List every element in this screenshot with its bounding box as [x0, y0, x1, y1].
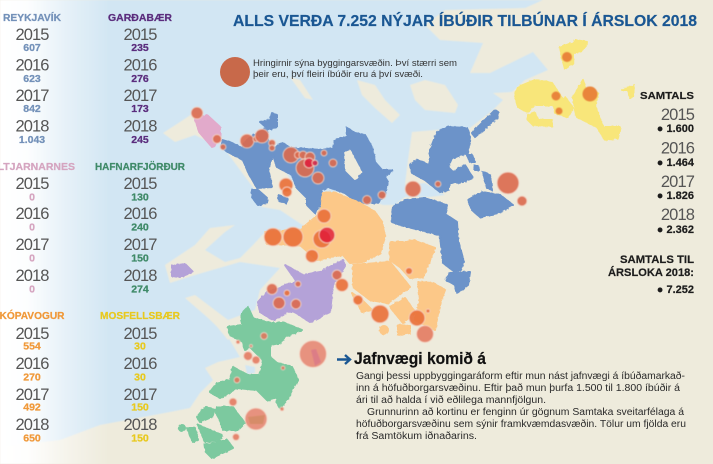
column: Kópavogur: 2017 [15, 386, 49, 404]
article text [356, 370, 686, 442]
column: Garðabær: 2018 [123, 118, 157, 136]
column: Seltjarnarnes: 0 [29, 222, 35, 234]
column: Kópavogur: 2015 [15, 325, 49, 343]
column: Kópavogur [0, 309, 65, 444]
column: Reykjavík: 607 [23, 42, 41, 54]
column: Kópavogur: 650 [23, 432, 41, 444]
column: Mosfellsbær: 2017 [123, 386, 157, 404]
totals by year: ● 1.826 [657, 190, 694, 202]
article text: Grunnurinn að kortinu er fenginn úr gögnum Samtaka sveitarfélaga á [367, 406, 684, 418]
column: Mosfellsbær: 30 [134, 372, 146, 384]
totals by year: 2016 [661, 140, 695, 158]
totals by year: 2017 [661, 173, 695, 191]
column: Kópavogur: KÓPAVOGUR [0, 309, 65, 322]
column: Seltjarnarnes: 0 [29, 252, 35, 264]
column: Mosfellsbær: 2015 [123, 325, 157, 343]
grand total: ● 7.252 [657, 284, 694, 296]
column: Reykjavík: 2015 [15, 26, 49, 44]
arrow icon [337, 355, 350, 364]
column: Seltjarnarnes: 0 [29, 284, 35, 296]
column: Reykjavík: 2017 [15, 87, 49, 105]
legend: circle explanation: þeir eru, því fleiri íbúðir eru á því svæði. [253, 69, 423, 79]
totals by year: 2015 [661, 106, 695, 124]
column: Hafnarfjörður: 2018 [123, 267, 157, 285]
article text: höfuðborgarsvæðinu sem sýnir framkvæmdasvæðin. Tölur um fjölda eru [356, 418, 686, 430]
column: Hafnarfjörður: 150 [131, 252, 149, 264]
map: Garðabær area (purple) [172, 260, 345, 322]
totals by year: ● 2.362 [657, 224, 694, 236]
legend: circle explanation: Hringirnir sýna byggingarsvæðin. Því stærri sem [253, 58, 457, 68]
totals by year: ● 1.464 [657, 157, 695, 169]
column: Mosfellsbær: 30 [134, 340, 146, 352]
column: Hafnarfjörður: 130 [131, 192, 149, 204]
column: Reykjavík [3, 11, 61, 146]
column: Garðabær: 276 [131, 73, 149, 85]
article text: ári til að halda í við eðlilega mannfjölgun. [356, 394, 546, 406]
column: Hafnarfjörður: 2016 [123, 205, 157, 223]
column: Garðabær [108, 12, 172, 146]
map: Hafnarfjörður area (green) [179, 307, 302, 458]
column: Reykjavík: 842 [23, 103, 41, 115]
column: Kópavogur: 270 [23, 372, 41, 384]
column: Seltjarnarnes: 2017 [15, 236, 49, 254]
column: Garðabær: 173 [131, 103, 149, 115]
map: Mosfellsbær area (yellow) [515, 40, 634, 140]
grand total: SAMTALS TIL [620, 254, 694, 266]
column: Mosfellsbær [100, 310, 180, 444]
column: Reykjavík: 1.043 [19, 134, 45, 146]
column: Hafnarfjörður: HAFNARFJÖRÐUR [95, 160, 185, 173]
column: Seltjarnarnes: 0 [29, 192, 35, 204]
column: Reykjavík: REYKJAVÍK [3, 11, 61, 24]
totals by year: SAMTALS [640, 90, 694, 102]
column: Garðabær: 2017 [123, 87, 157, 105]
column: Garðabær: 245 [131, 134, 149, 146]
column: Mosfellsbær: MOSFELLSBÆR [100, 310, 180, 322]
column: Hafnarfjörður: 2017 [123, 236, 157, 254]
title: ALLS VERÐA 7.252 NÝJAR ÍBÚÐIR TILBÚNAR Í ÁRSLOK 2018 [233, 11, 697, 30]
column: Kópavogur: 2018 [15, 416, 49, 434]
column: Kópavogur: 554 [23, 340, 41, 352]
grand total [608, 254, 694, 296]
article heading: Jafnvægi komið á [354, 350, 487, 368]
article text: inn á höfuðborgarsvæðinu. Eftir það mun þurfa 1.500 til 1.800 íbúðir á [356, 382, 680, 394]
map: Reykjavík area (blue) [222, 110, 513, 293]
column: Seltjarnarnes: 2018 [15, 267, 49, 285]
map: building-area circles [191, 52, 598, 440]
column: Kópavogur: 492 [23, 402, 41, 414]
column: Mosfellsbær: 2016 [123, 355, 157, 373]
legend: circle explanation [220, 57, 457, 87]
article text: Gangi þessi uppbyggingaráform eftir mun nást jafnvægi á íbúðamarkað- [356, 370, 685, 382]
column: Hafnarfjörður: 240 [131, 222, 149, 234]
column: Seltjarnarnes: 2015 [15, 175, 49, 193]
column: Mosfellsbær: 150 [131, 402, 149, 414]
column: Garðabær: GARÐABÆR [108, 12, 172, 24]
column: Hafnarfjörður: 2015 [123, 175, 157, 193]
column: Reykjavík: 2018 [15, 118, 49, 136]
column: Seltjarnarnes: 2016 [15, 205, 49, 223]
column: Hafnarfjörður [95, 160, 185, 296]
map: Kópavogur area (orange) [265, 192, 445, 335]
column: Garðabær: 235 [131, 42, 149, 54]
totals by year: ● 1.600 [657, 123, 694, 135]
column: Garðabær: 2015 [123, 26, 157, 44]
totals by year: 2018 [661, 206, 695, 224]
column: Seltjarnarnes [0, 161, 75, 296]
column: Reykjavík: 623 [23, 73, 41, 85]
column: Hafnarfjörður: 274 [131, 284, 149, 296]
totals by year [640, 90, 695, 236]
article text: frá Samtökum iðnaðarins. [356, 430, 477, 442]
column: Mosfellsbær: 2018 [123, 416, 157, 434]
column: Reykjavík: 2016 [15, 56, 49, 74]
column: Garðabær: 2016 [123, 56, 157, 74]
column: Kópavogur: 2016 [15, 355, 49, 373]
column: Mosfellsbær: 150 [131, 432, 149, 444]
grand total: ÁRSLOKA 2018: [608, 266, 694, 279]
map: Seltjarnarnes area (pink) [195, 115, 220, 147]
